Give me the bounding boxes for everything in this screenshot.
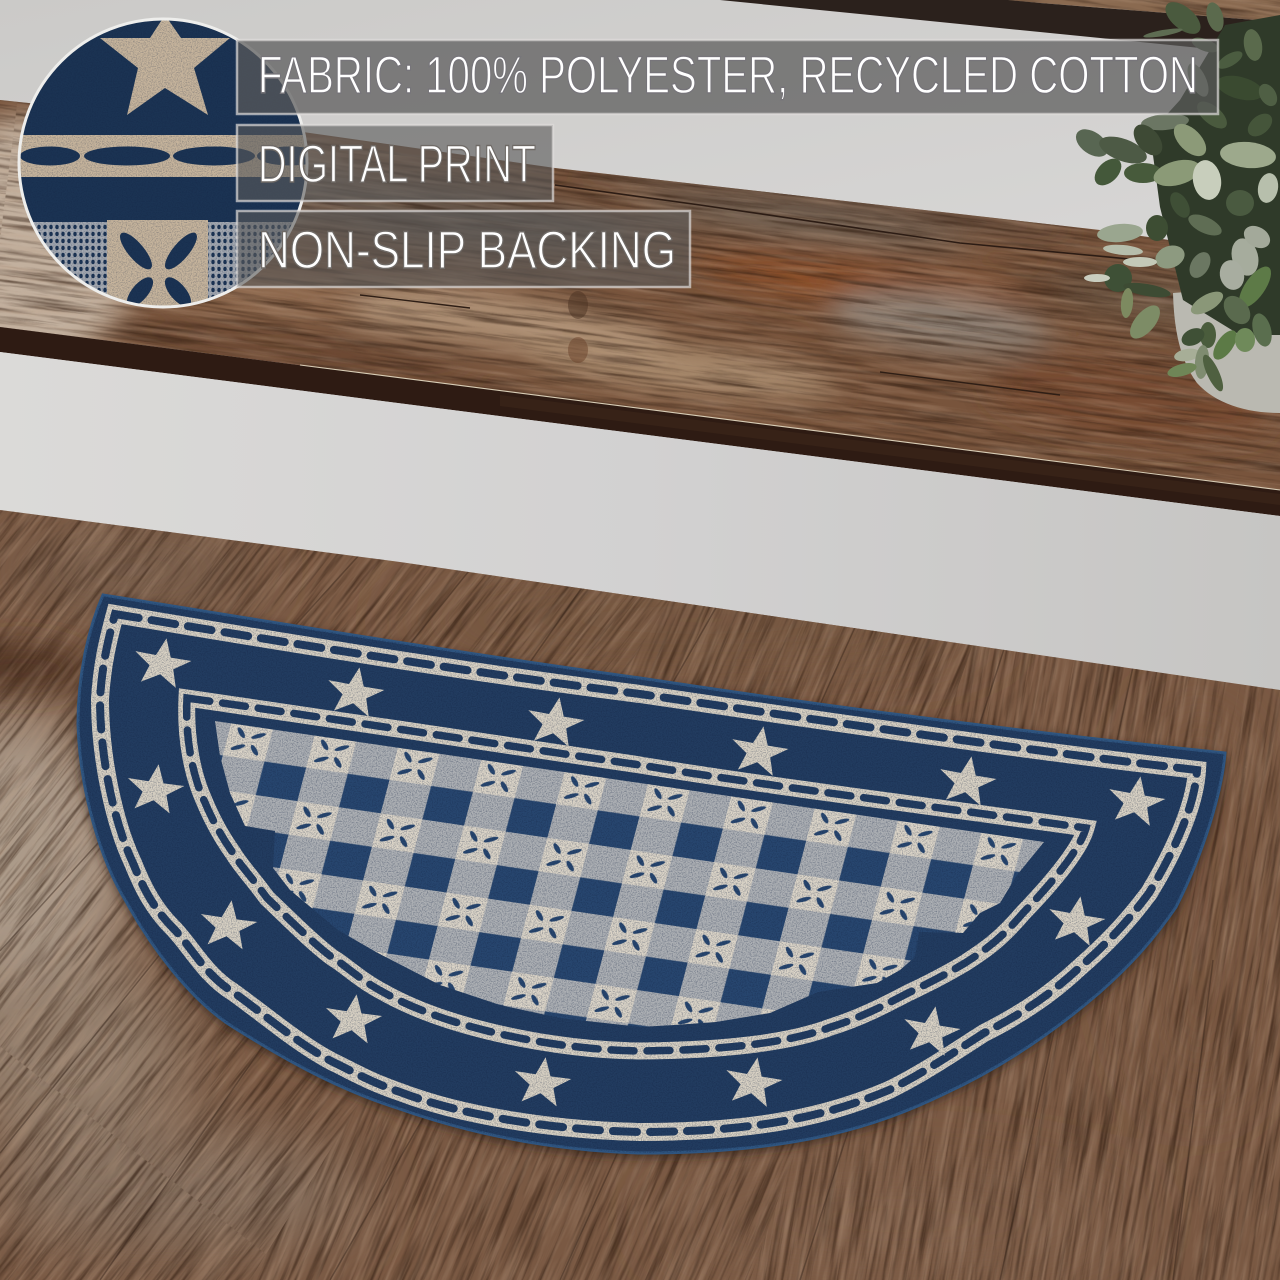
top tread grain <box>1012 0 1280 20</box>
stars <box>124 633 1169 1109</box>
leaves <box>1071 0 1280 394</box>
close-up gingham <box>33 220 293 306</box>
rug shadow <box>76 598 1228 1158</box>
half-round rug <box>70 590 1235 1160</box>
foliage mass <box>1150 15 1280 335</box>
outer chain border <box>100 614 1197 1132</box>
inner chain border <box>187 698 1086 1051</box>
label: non-slip backing <box>237 211 690 287</box>
label: non-slip backing: NON-SLIP BACKING <box>258 221 676 280</box>
label: digital print: DIGITAL PRINT <box>258 135 536 194</box>
rug base <box>78 595 1225 1153</box>
close-up star <box>100 15 230 115</box>
lower wall <box>0 352 1280 690</box>
middle stair tread wood <box>0 100 1280 500</box>
pot <box>1173 285 1280 413</box>
close-up stitched band <box>15 135 323 177</box>
top stair tread and dark nosing <box>720 0 1280 56</box>
upper wall <box>0 0 1280 270</box>
label: digital print <box>237 125 553 201</box>
tread front dark edge <box>0 327 1280 516</box>
dark reflection patch <box>0 642 90 694</box>
gingham field <box>215 721 1044 1027</box>
wooden floor <box>0 500 1280 1280</box>
potted plant <box>1071 0 1280 413</box>
circular fabric close-up <box>15 15 323 315</box>
rug weave texture <box>70 590 1235 1160</box>
close-up fabric <box>20 20 306 306</box>
